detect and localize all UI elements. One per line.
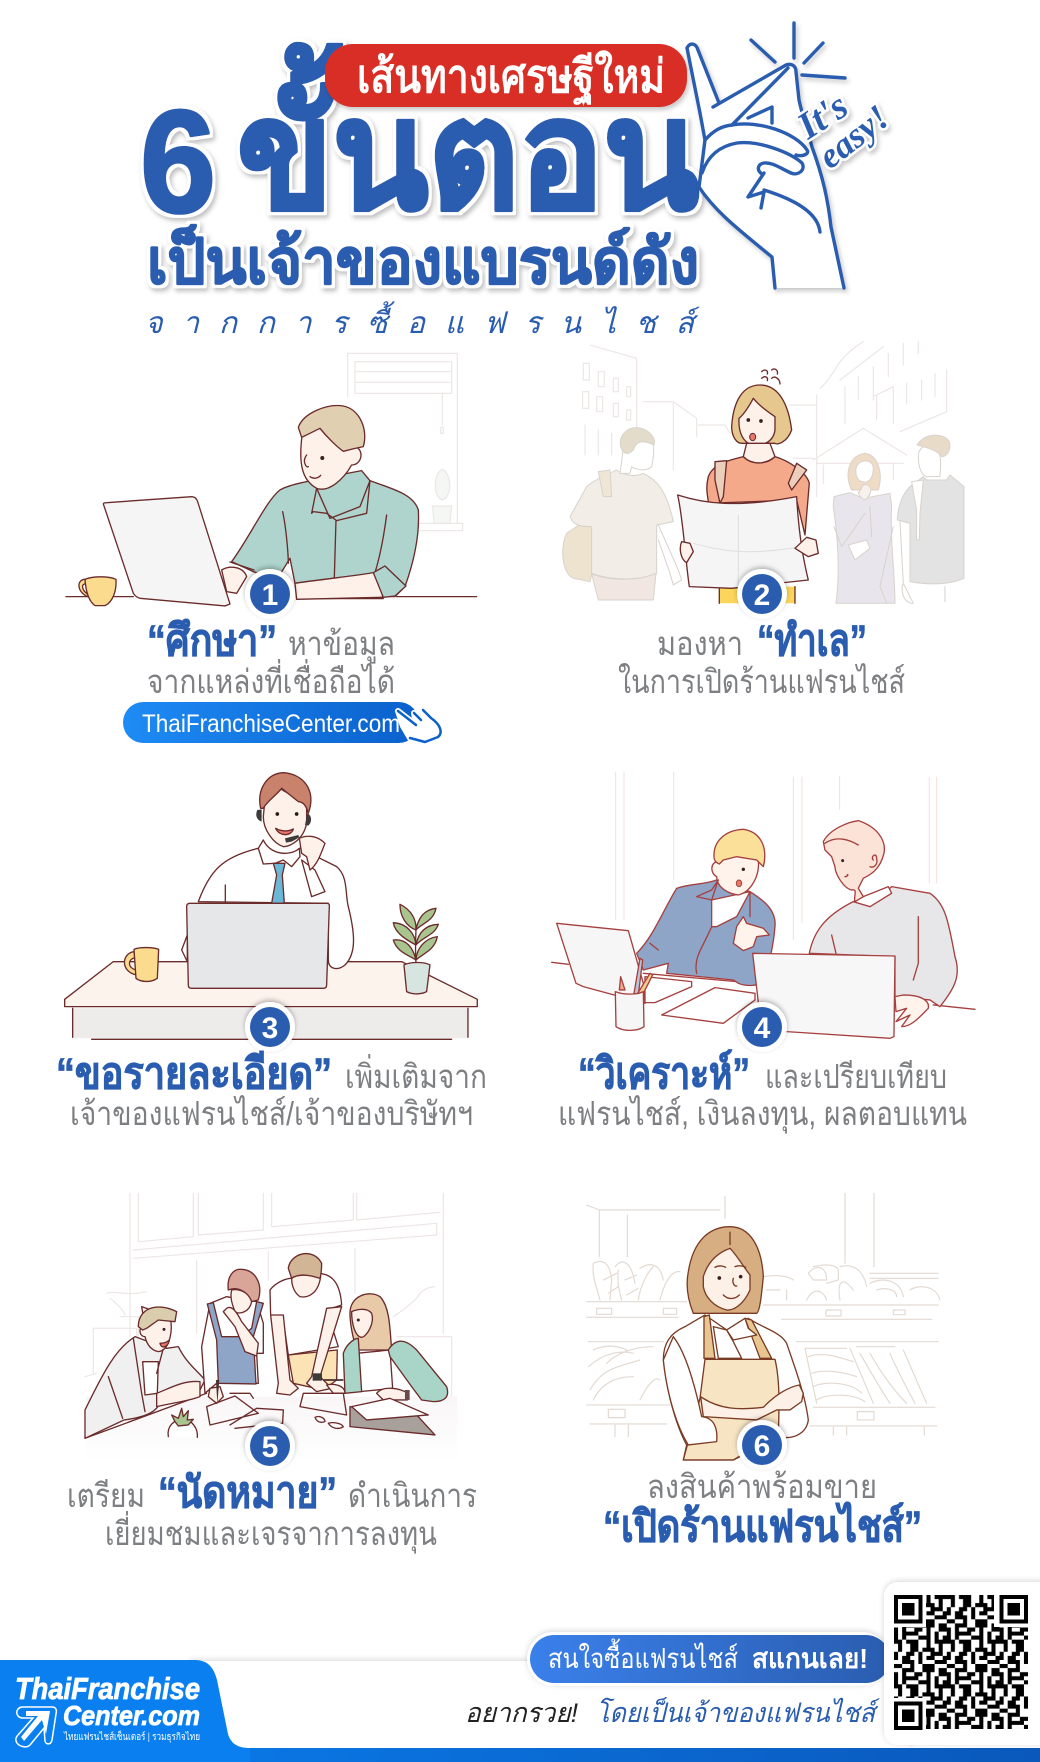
caption: open store (603, 1468, 922, 1551)
illustration: shop owner in bakery (587, 1193, 940, 1460)
footer blue band (0, 1748, 1040, 1762)
red pill: new economy path: เส้นทางเศรษฐีใหม่ (357, 49, 665, 106)
cta pill: scan now: สนใจซื้อแฟรนไชส์ (548, 1638, 738, 1674)
logo tab: ThaiFranchise Center: ไทยแฟรนไชส์เซ็นเตอร์ | รวมธุรกิจไทย (63, 1729, 200, 1743)
logo tab: ThaiFranchise Center: ThaiFranchise (15, 1671, 200, 1706)
step number 6: 6 (754, 1430, 770, 1463)
papers and table items (207, 1393, 347, 1428)
cta pill: scan now: สแกนเลย! (752, 1643, 868, 1674)
title: big heading 6 steps: 6 (140, 80, 216, 243)
step number 2: 2 (754, 579, 770, 612)
panel: step 5 appointment (67, 1193, 477, 1554)
caption: analyse: “วิเคราะห์” (578, 1049, 750, 1098)
woman in cardigan (350, 1294, 392, 1350)
step number 5: 5 (262, 1431, 278, 1464)
person with apron (202, 1297, 263, 1393)
illustration: two men comparing on laptops (552, 772, 975, 1038)
step number 6 (737, 1420, 787, 1470)
step number 5 (245, 1421, 295, 1471)
badge text: It's easy!: It's (789, 85, 855, 148)
step number 2 (737, 569, 787, 619)
slogan: want to be rich: อยากรวย! (465, 1698, 578, 1728)
caption: study: หาข้อมูล (288, 625, 395, 664)
sparks (751, 23, 845, 78)
panel: step 3 ask for details (56, 773, 487, 1132)
illustration: man with headset at desk (65, 773, 477, 1039)
logo tab: ThaiFranchise Center: Center.com (63, 1700, 200, 1731)
footer white panel shadow line (190, 1661, 910, 1748)
panel: step 1 study (66, 353, 477, 743)
link pill: ThaiFranchiseCenter.com (123, 702, 441, 743)
caption: study: จากแหล่งที่เชื่อถือได้ (147, 659, 395, 700)
title: big heading 6 steps (140, 43, 699, 243)
slogan: want to be rich (465, 1697, 881, 1728)
caption: appointment: เตรียม (67, 1477, 145, 1514)
icon: pointing hand (398, 710, 441, 742)
caption: location: ในการเปิดร้านแฟรนไชส์ (618, 663, 905, 700)
panel: step 2 location (563, 342, 964, 700)
tagline: from buying a franchise: จากการซื้อแฟรนไชส์ (145, 301, 700, 340)
icon: logo arrow (16, 1707, 56, 1747)
main woman (719, 587, 795, 603)
caption: analyse (558, 1049, 967, 1134)
step number 1: 1 (262, 579, 278, 612)
qr code (884, 1582, 1040, 1745)
caption: ask for details: “ขอรายละเอียด” (56, 1050, 332, 1098)
footer (0, 1582, 1040, 1762)
person left in jacket (85, 1337, 205, 1438)
title block (140, 23, 896, 340)
caption: ask for details (56, 1050, 487, 1132)
badge text: It's easy!: easy! (810, 97, 896, 176)
panel: step 6 open store (587, 1193, 940, 1551)
step number 4: 4 (754, 1012, 771, 1045)
caption: ask for details: เพิ่มเติมจาก (345, 1054, 487, 1095)
step number 1 (245, 569, 295, 619)
caption: appointment: “นัดหมาย” (158, 1469, 337, 1517)
title: big heading 6 steps: ขั้นตอน (237, 43, 699, 241)
caption: location: มองหา (657, 625, 743, 662)
caption: location (618, 617, 905, 700)
standing man (288, 1350, 337, 1390)
step number 3 (245, 1002, 295, 1052)
background woman (848, 453, 880, 490)
caption: appointment: ดำเนินการ (348, 1477, 477, 1514)
subtitle: become owner of famous brand: เป็นเจ้าของแบรนด์ดัง (147, 224, 699, 297)
illustration: team around a table (85, 1193, 457, 1462)
step number 4 (737, 1002, 787, 1052)
logo tab: ThaiFranchise Center (0, 1660, 250, 1762)
caption: study (147, 617, 395, 700)
caption: study: “ศึกษา” (147, 617, 277, 665)
illustration: woman with map among tourists (563, 342, 964, 603)
icon: snapping hand (687, 23, 845, 288)
caption: open store: “เปิดร้านแฟรนไชส์” (603, 1501, 922, 1551)
panel: step 4 analyse (552, 772, 975, 1134)
step number 3: 3 (262, 1012, 278, 1045)
caption: analyse: แฟรนไชส์, เงินลงทุน, ผลตอบแทน (558, 1095, 967, 1134)
caption: appointment (67, 1469, 477, 1554)
link pill: ThaiFranchiseCenter.com: ThaiFranchiseCenter.com (142, 710, 400, 738)
cta pill: scan now (527, 1632, 890, 1686)
slogan: want to be rich: โดยเป็นเจ้าของแฟรนไชส์ (596, 1697, 881, 1728)
caption: analyse: และเปรียบเทียบ (765, 1058, 947, 1095)
caption: location: “ทำเล” (757, 617, 867, 665)
caption: open store: ลงสินค้าพร้อมขาย (647, 1468, 877, 1505)
background man (563, 493, 610, 582)
caption: appointment: เยี่ยมชมและเจรจาการลงทุน (105, 1511, 437, 1554)
caption: ask for details: เจ้าของแฟรนไชส์/เจ้าของบริษัทฯ (70, 1095, 473, 1132)
background man right (897, 475, 964, 584)
badge text: It's easy! (789, 85, 896, 176)
illustration: man with laptop (66, 353, 477, 606)
